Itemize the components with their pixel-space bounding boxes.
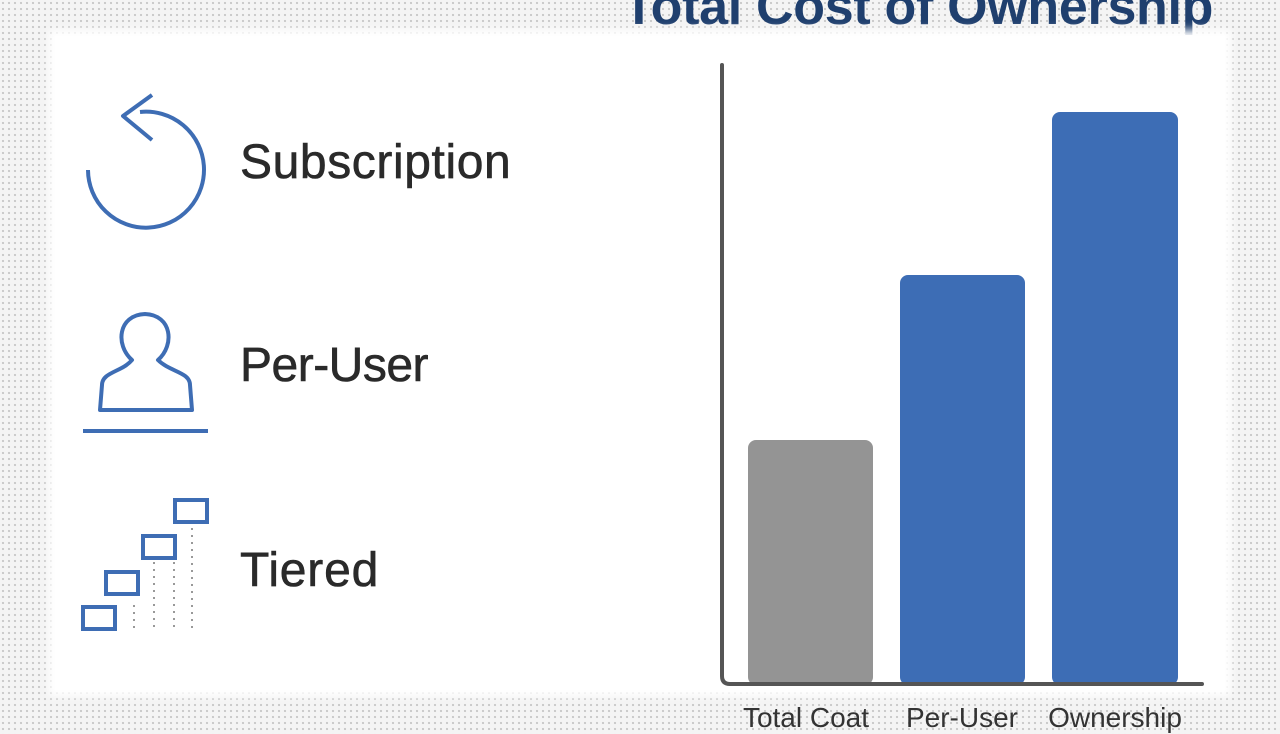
icon: per-user [83, 312, 208, 433]
bar chart [720, 63, 1204, 686]
axis labels: Per-User [906, 702, 1018, 733]
text: per-user: Per-User [240, 339, 428, 392]
axis labels [743, 702, 1182, 733]
axis labels: Ownership [1048, 702, 1182, 733]
text: subscription: Subscription [240, 136, 511, 189]
icon: tiered [81, 498, 209, 631]
text: tiered: Tiered [240, 544, 379, 597]
icon: subscription [86, 93, 206, 230]
axis labels: Total Coat [743, 702, 869, 733]
